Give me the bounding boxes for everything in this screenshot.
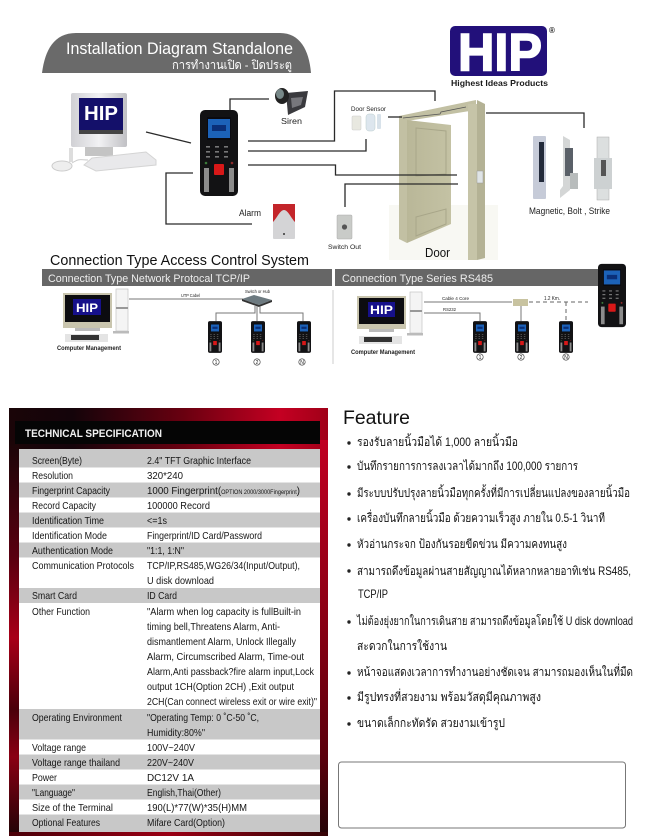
header banner: [42, 33, 311, 73]
spec table: Identification Time: [32, 515, 104, 527]
label: siren: Siren: [281, 116, 302, 126]
feature list: [347, 433, 633, 731]
logo letters: HIP: [458, 24, 542, 82]
wiring lines: [146, 91, 584, 224]
spec table: 100000 Record: [147, 500, 210, 512]
spec table: dismantlement Alarm, Unlock Illegally: [147, 636, 297, 648]
marker N: N: [564, 355, 568, 361]
spec table: DC12V 1A: [147, 772, 194, 784]
reader 1: [208, 321, 222, 353]
marker 2: 2: [256, 360, 259, 366]
RS485 computer: HIP: [370, 303, 393, 317]
header title: Installation Diagram Standalone: [66, 40, 293, 58]
spec table: Mifare Card(Option): [147, 817, 225, 829]
door floor shadow: [389, 205, 498, 260]
label: computer management: Computer Management: [351, 349, 416, 356]
spec table: Operating Environment: [32, 712, 122, 724]
spec table: 100V~240V: [147, 742, 195, 754]
registered mark: ®: [549, 26, 555, 35]
marker 1: [213, 359, 219, 366]
feature list: ขนาดเล็กกะทัดรัด สวยงามเข้ารูป: [357, 715, 505, 731]
label: alarm: Alarm: [239, 208, 261, 218]
marker N: N: [300, 360, 304, 366]
icon: siren: [275, 88, 308, 115]
RS485 bar: [335, 269, 601, 286]
heading: connection type: Connection Type Access Control System: [50, 253, 309, 269]
marker 2: [254, 359, 260, 366]
spec table: "Language": [32, 787, 75, 799]
empty note box: [338, 762, 626, 828]
spec table: timing bell,Threatens Alarm, Anti-: [147, 621, 280, 633]
spec table: Size of the Terminal: [32, 802, 113, 814]
panel: RS485 connection: [335, 264, 626, 361]
spec table: 1000 Fingerprint(OPTION 2000/3000Fingerprint): [147, 485, 300, 497]
spec table: Record Capacity: [32, 500, 97, 512]
marker 1: 1: [479, 355, 482, 361]
marker 2: [518, 354, 524, 361]
icon: desktop computer: [52, 93, 156, 171]
network bar: [42, 269, 332, 286]
feature list: รองรับลายนิ้วมือได้ 1,000 ลายนิ้วมือ: [357, 433, 518, 449]
spec table: Humidity:80%": [147, 727, 205, 739]
feature list: บันทึกรายการการลงเวลาได้มากถึง 100,000 รายการ: [357, 459, 578, 473]
spec table: 2.4" TFT Graphic Interface: [147, 455, 251, 467]
icon: alarm box: [273, 204, 295, 239]
HIP logo: [450, 24, 555, 88]
heading: feature: Feature: [343, 408, 410, 429]
spec table: Alarm,Anti passback?fire alarm input,Lock: [147, 666, 315, 678]
label: door sensor: Door Sensor: [351, 106, 387, 113]
spec table: Power: [32, 772, 57, 784]
spec table: "Operating Temp: 0 ˚C-50 ˚C,: [147, 712, 259, 724]
spec table: "1:1, 1:N": [147, 545, 184, 557]
feature list: หัวอ่านกระจก ป้องกันรอยขีดข่วน มีความคงทนสูง: [357, 537, 567, 552]
spec table: 2CH(Can connect wireless exit or wire exit)": [147, 696, 317, 708]
1.2 km dashed link: [529, 296, 588, 320]
RS485 bar: Connection Type Series RS485: [342, 273, 493, 285]
spec heading: TECHNICAL SPECIFICATION: [25, 428, 162, 440]
illustration: door: [399, 100, 485, 260]
icon: strike lock: [594, 137, 612, 200]
spec table: output 1CH(Option 2CH) ,Exit output: [147, 681, 294, 693]
network wires: [216, 306, 303, 321]
reader 2: [515, 321, 529, 353]
monitor HIP text: HIP: [84, 103, 118, 125]
label: door: Door: [425, 245, 451, 260]
switch or hub: Switch or Hub: [245, 289, 270, 294]
spec table: 320*240: [147, 470, 183, 482]
marker 1: 1: [215, 360, 218, 366]
label: lock types: Magnetic, Bolt , Strike: [529, 206, 610, 216]
feature list: TCP/IP: [358, 587, 388, 601]
UTP cable: [129, 293, 243, 299]
spec table: <=1s: [147, 515, 167, 527]
feature list: มีรูปทรงที่สวยงาม พร้อมวัสดุมีคุณภาพสูง: [357, 688, 541, 705]
marker 1: [477, 354, 483, 361]
marker N: [563, 354, 569, 361]
switch or hub: [242, 289, 272, 307]
reader 2: [251, 321, 265, 353]
spec table: "Alarm when log capacity is fullBuilt-in: [147, 606, 301, 618]
icon: bolt lock: [560, 136, 578, 198]
spec table: Communication Protocols: [32, 560, 134, 572]
spec table: Screen(Byte): [32, 455, 82, 467]
icon: switch out plate: [337, 215, 352, 239]
feature list: สะดวกในการใช้งาน: [357, 639, 447, 653]
panel: technical specification: [9, 408, 328, 836]
1.2 km dashed link: 1.2 Km.: [544, 296, 560, 302]
spec table: English,Thai(Other): [147, 787, 221, 799]
spec table: TCP/IP,RS485,WG26/34(Input/Output),: [147, 560, 300, 572]
spec table: Fingerprint Capacity: [32, 485, 111, 497]
spec table: 190(L)*77(W)*35(H)MM: [147, 802, 247, 814]
spec table: Other Function: [32, 606, 90, 618]
label: switch out: Switch Out: [328, 244, 361, 251]
cable 4 core: [424, 296, 512, 302]
icon: access control reader: [200, 110, 238, 196]
spec table: ID Card: [147, 590, 177, 602]
spec table: Voltage range: [32, 742, 86, 754]
icon: magnetic lock: [533, 136, 546, 199]
spec table: 220V~240V: [147, 757, 194, 769]
spec table: Smart Card: [32, 590, 77, 602]
RS232 cable: RS232: [443, 307, 456, 313]
marker N: [299, 359, 305, 366]
cable 4 core: Cable 4 Core: [442, 296, 469, 302]
network computer: [63, 289, 129, 342]
RS485 computer: [357, 292, 423, 344]
spec table: Optional Features: [32, 817, 100, 829]
network bar: Connection Type Network Protocal TCP/IP: [48, 273, 250, 285]
spec table: U disk download: [147, 575, 214, 587]
header Thai subtitle: การทำงานเปิด - ปิดประตู: [172, 58, 292, 73]
panel: network connection: [42, 269, 332, 366]
large reader: [598, 264, 626, 327]
spec table: Voltage range thailand: [32, 757, 120, 769]
network computer: HIP: [76, 301, 98, 315]
marker 2: 2: [520, 355, 523, 361]
reader N: [559, 321, 573, 353]
spec table: Resolution: [32, 470, 73, 482]
spec table: Fingerprint/ID Card/Password: [147, 530, 262, 542]
label: computer management: Computer Management: [57, 345, 122, 352]
feature list: เครื่องบันทึกลายนิ้วมือ ด้วยความเร็วสูง ภายใน 0.5-1 วินาที: [357, 509, 605, 526]
connector: [513, 299, 528, 321]
spec table: [19, 449, 320, 832]
spec table: Identification Mode: [32, 530, 107, 542]
spec table: Authentication Mode: [32, 545, 113, 557]
spec heading: [15, 421, 320, 444]
spec table: Alarm, Circumscribed Alarm, Time-out: [147, 651, 304, 663]
logo tagline: Highest Ideas Products: [451, 78, 548, 88]
reader N: [297, 321, 311, 353]
UTP cable: UTP Cabel: [181, 293, 200, 299]
reader 1: [473, 321, 487, 353]
RS232 cable: [424, 307, 480, 321]
icon: door sensor: [352, 114, 381, 131]
